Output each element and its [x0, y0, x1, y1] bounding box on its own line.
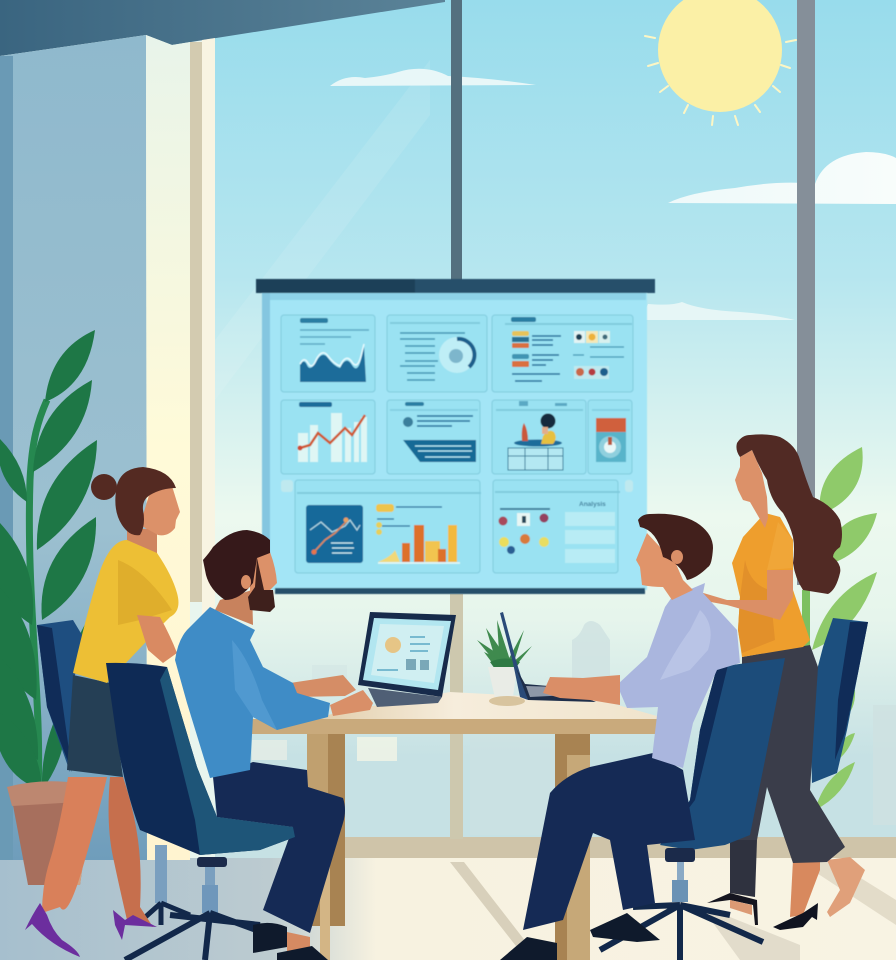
sleeve fold: [660, 610, 711, 680]
left shoe: [25, 903, 80, 957]
near shoe: [500, 937, 557, 960]
skirt: [67, 675, 123, 777]
panel: text callout: [387, 400, 480, 474]
laptop right: [500, 612, 596, 702]
display sheet: [262, 293, 647, 590]
blue shirt: [175, 607, 330, 778]
face: [250, 552, 277, 605]
left plant: [0, 330, 97, 790]
face: [140, 486, 180, 535]
man in grey shirt: [500, 514, 740, 960]
man in blue shirt chair base: [125, 857, 270, 960]
panel: trend and bars: [281, 480, 481, 573]
foot on sandal: [730, 900, 752, 915]
shirt: [617, 583, 740, 768]
ear: [671, 550, 683, 564]
arm: [137, 615, 177, 663]
orange shirt: [732, 513, 810, 657]
chair of man in blue shirt: [106, 663, 295, 855]
sleeve shade: [232, 640, 277, 730]
chair of man in grey shirt: [660, 658, 785, 850]
far shoe: [253, 923, 287, 953]
panel: icon lists: [492, 315, 633, 392]
second chair base left: [142, 845, 190, 925]
woman in yellow shirt: [25, 467, 180, 957]
tabletop: [252, 692, 657, 722]
window mullions: [450, 0, 815, 839]
far leg: [730, 840, 757, 897]
ankle: [287, 932, 310, 953]
sandal: [707, 893, 758, 925]
long wavy hair: [736, 434, 842, 594]
table edge: [252, 719, 657, 734]
far shoe: [590, 913, 660, 942]
near leg skin: [790, 860, 820, 917]
high heel: [773, 903, 818, 930]
near shoe: [277, 946, 328, 960]
panel: area chart: [281, 315, 375, 392]
raised foot: [827, 857, 865, 917]
neck: [215, 590, 253, 625]
background: window sky: [215, 0, 896, 860]
hair: [115, 467, 176, 535]
woman in orange shirt: [700, 434, 865, 930]
chair behind woman in yellow: [37, 620, 85, 772]
wall display: [256, 279, 655, 594]
label: analysis: Analysis: [579, 501, 606, 508]
chair behind woman in orange: [810, 618, 868, 783]
yellow shirt: [73, 540, 178, 683]
right plant: [806, 447, 877, 810]
sun: [645, 0, 796, 125]
sunlight beam across the glass: [215, 60, 430, 400]
distant city skyline: [252, 621, 896, 835]
hair: [203, 530, 270, 600]
ear: [241, 575, 251, 589]
cloud: behind display: [640, 302, 795, 320]
man in blue shirt: [175, 530, 373, 960]
forearm and hand: [543, 675, 620, 705]
front forearm and hand: [330, 690, 373, 716]
plant on table: [477, 620, 532, 706]
neck: [127, 528, 157, 555]
arm reaching to shoulder: [700, 570, 793, 620]
chair base right: [600, 848, 763, 960]
trousers: [523, 753, 695, 930]
far forearm: [290, 675, 356, 697]
right table leg: [555, 730, 590, 960]
sleeve: [767, 522, 793, 570]
left wall: [0, 35, 147, 860]
right plant leaves: [812, 447, 877, 810]
ceiling: [0, 0, 445, 56]
floor: [0, 858, 896, 960]
window pillar and frame: [146, 35, 215, 860]
left leg: [42, 777, 107, 913]
display bottom bar: [275, 588, 645, 594]
panel: donut summary: [387, 315, 487, 392]
leaf set: [0, 330, 97, 790]
window sill: [345, 837, 896, 862]
panel: line and bar chart: [281, 400, 375, 474]
trousers: [725, 645, 845, 863]
display top roller: [256, 279, 655, 293]
left table leg: [307, 733, 345, 960]
panel: network and list: [493, 480, 633, 573]
cloud: top center: [330, 69, 536, 86]
left plant pot: [7, 781, 92, 885]
laptop left: [358, 612, 456, 707]
face and neck: [735, 450, 768, 528]
panel: poster card: [588, 400, 632, 474]
hair: [638, 514, 713, 580]
right shoe: [113, 910, 157, 940]
face and neck: [636, 533, 693, 600]
hair bun: [91, 474, 117, 500]
right leg: [109, 777, 153, 927]
sleeve shade: [118, 560, 172, 625]
chest shade: [738, 560, 775, 653]
table: [252, 692, 657, 960]
beard: [248, 558, 275, 612]
cloud: right: [668, 152, 896, 204]
panel: figure with table: [492, 400, 586, 474]
trousers: [213, 762, 345, 933]
